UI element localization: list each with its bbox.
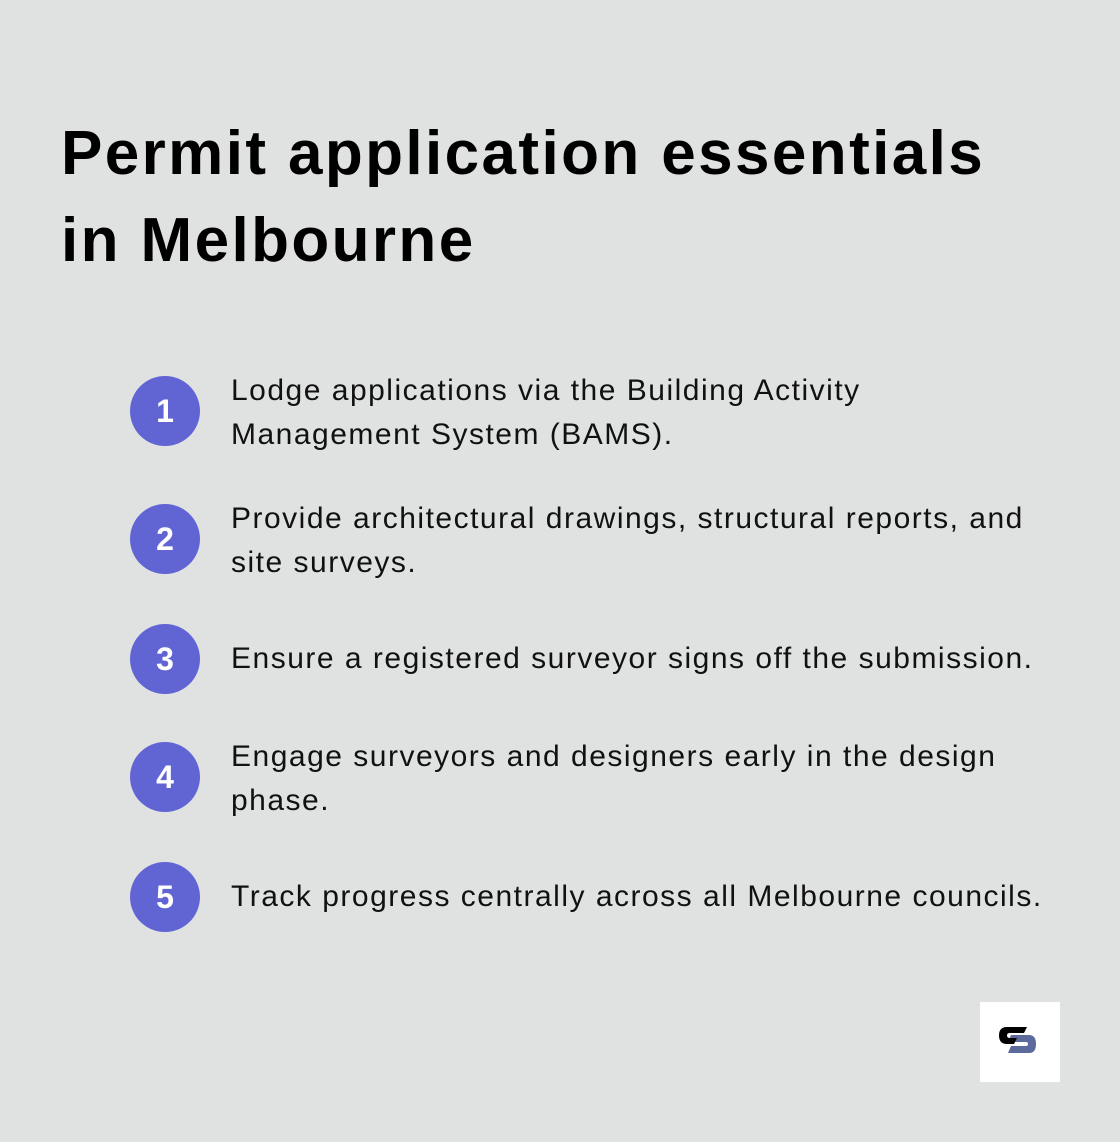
item 2: [130, 502, 1024, 579]
item 2: 2: [156, 521, 174, 557]
item 1: 1: [156, 393, 174, 429]
item 3: [130, 624, 1033, 694]
item 1: Management System (BAMS).: [231, 418, 674, 451]
title: in Melbourne: [61, 206, 476, 275]
item 5: 5: [156, 879, 174, 915]
item 1: [130, 374, 861, 451]
title: Permit application essentials: [61, 119, 985, 188]
item 2: site surveys.: [231, 546, 417, 579]
item 3: Ensure a registered surveyor signs off the submission.: [231, 642, 1033, 675]
logo: [980, 1002, 1060, 1082]
item 4: phase.: [231, 784, 330, 817]
item 4: 4: [156, 759, 174, 795]
item 4: [130, 740, 996, 817]
title: [61, 119, 985, 275]
item 3: 3: [156, 641, 174, 677]
item 4: Engage surveyors and designers early in the design: [231, 740, 996, 773]
item 1: Lodge applications via the Building Activity: [231, 374, 861, 407]
item 2: Provide architectural drawings, structural reports, and: [231, 502, 1024, 535]
item 5: [130, 862, 1043, 932]
item 5: Track progress centrally across all Melbourne councils.: [231, 880, 1043, 913]
